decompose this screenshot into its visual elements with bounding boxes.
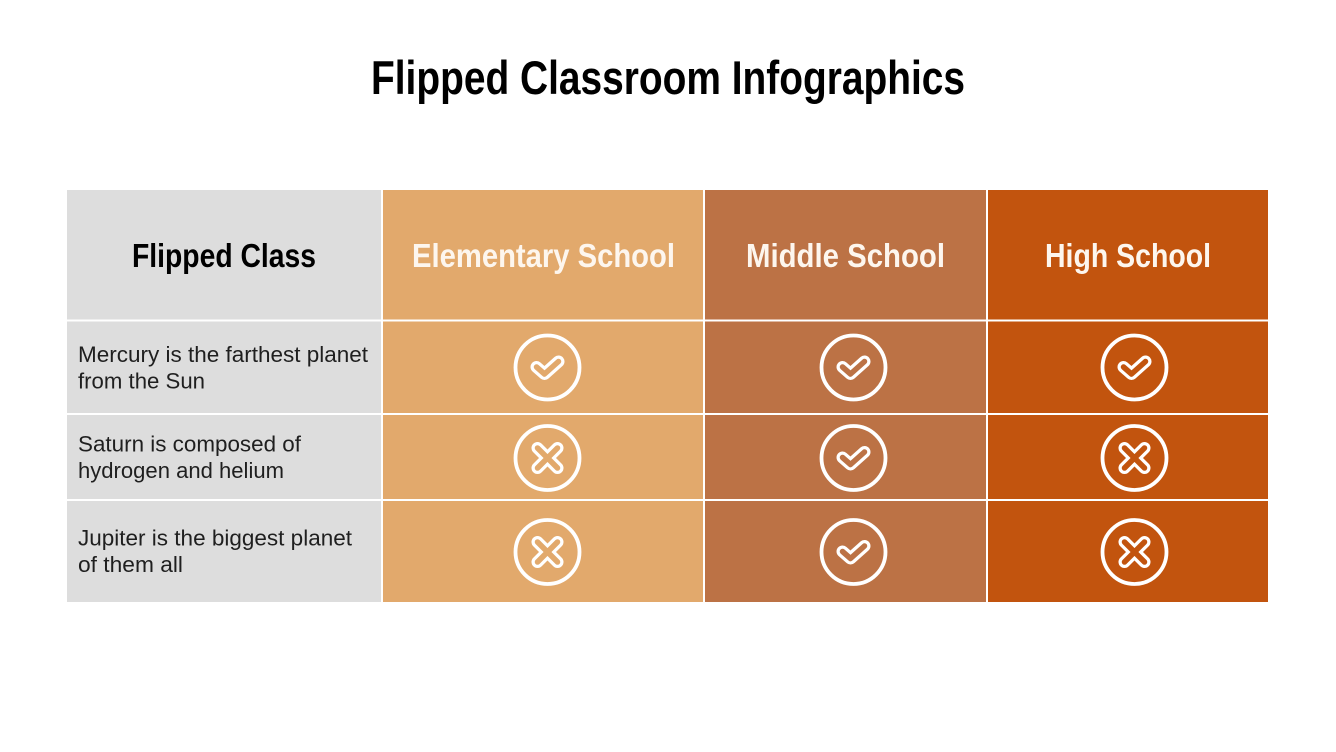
text: Mercury row: from the Sun	[78, 368, 205, 394]
comparison table	[67, 190, 1268, 602]
text: Mercury row	[78, 342, 368, 394]
text: Mercury row: Mercury is the farthest planet	[78, 342, 368, 367]
icon: check	[516, 336, 580, 400]
icon: cross	[516, 520, 580, 584]
panel: row labels column	[67, 190, 381, 602]
panel: High School column	[988, 190, 1268, 602]
heading: Middle School: Middle School	[746, 238, 945, 275]
title: Flipped Classroom Infographics	[371, 51, 965, 104]
icon: cross	[1102, 520, 1166, 584]
text: Jupiter row	[78, 526, 352, 577]
text: Jupiter row: of them all	[78, 552, 183, 577]
panel: Elementary School column	[383, 190, 703, 602]
heading: High School: High School	[1045, 238, 1211, 275]
text: Saturn row: hydrogen and helium	[78, 458, 284, 483]
heading: Flipped Class: Flipped Class	[132, 238, 316, 275]
text: Saturn row: Saturn is composed of	[78, 432, 302, 456]
text: Jupiter row: Jupiter is the biggest planet	[78, 526, 352, 550]
icon: check	[822, 520, 886, 584]
heading: Elementary School: Elementary School	[412, 238, 675, 275]
icon: cross	[516, 426, 580, 490]
icon: check	[822, 336, 886, 400]
icon: cross	[1102, 426, 1166, 490]
icon: check	[822, 426, 886, 490]
text: Saturn row	[78, 432, 302, 483]
panel: Middle School column	[705, 190, 986, 602]
icon: check	[1102, 336, 1166, 400]
